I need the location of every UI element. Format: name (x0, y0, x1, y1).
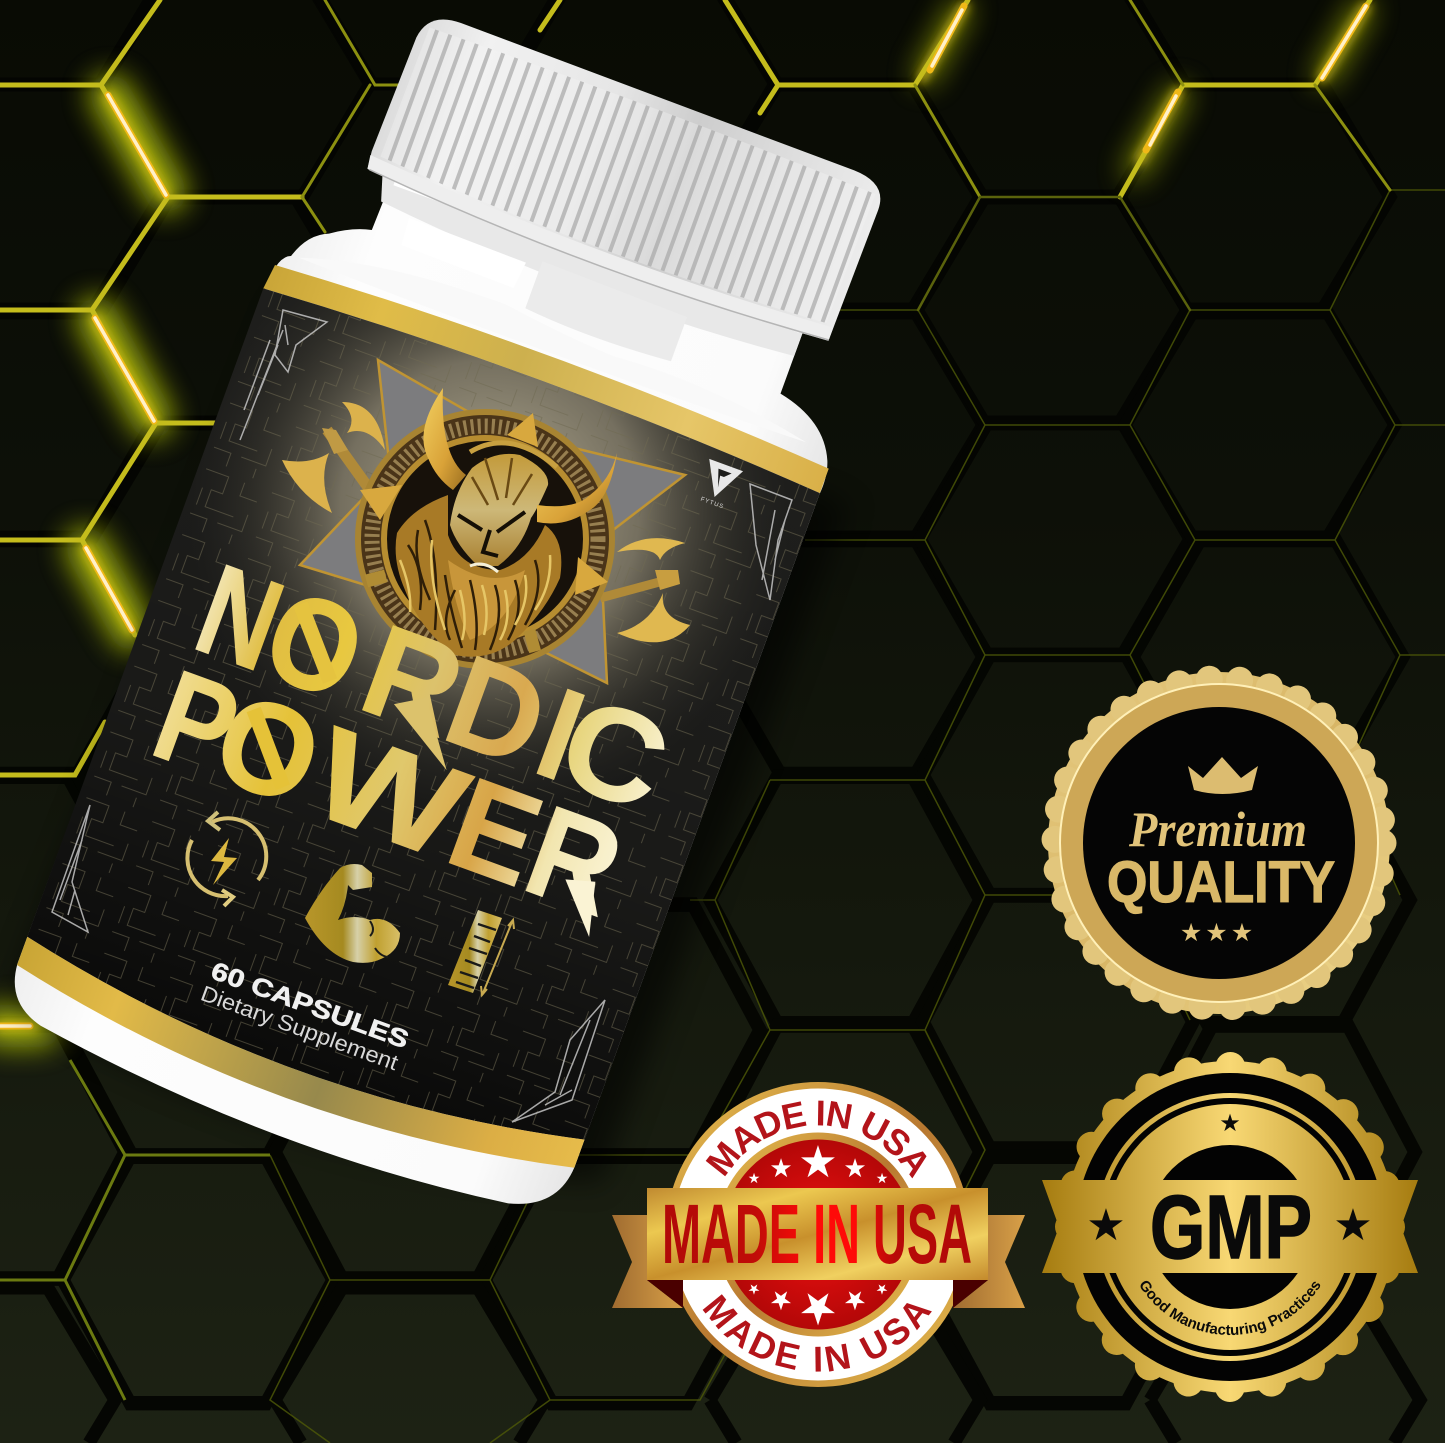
neck shading (369, 174, 804, 365)
bottle cap (361, 9, 889, 349)
seal edge (1048, 672, 1390, 1014)
bottom gold band (6, 937, 585, 1199)
nordic slash and leg (264, 604, 483, 770)
wide glow halo left (0, 95, 166, 1026)
stars: ★ (876, 1281, 888, 1297)
very dim edges (918, 197, 1190, 310)
nordic word: R (345, 596, 481, 765)
star top: ★ (1219, 1109, 1241, 1137)
ribbon stars: ★ (1086, 1200, 1126, 1251)
axe lower right (600, 538, 690, 642)
horn right (537, 453, 617, 524)
ribbon tails (612, 1215, 1025, 1308)
dimmer edges (302, 0, 1390, 232)
icon: energy (187, 812, 266, 906)
stars: ★ (843, 1153, 867, 1183)
power word: P (137, 642, 256, 804)
ribbon text: MADE IN USA (662, 1187, 972, 1281)
stars: ★ (748, 1170, 760, 1186)
label maze pattern (16, 280, 823, 1171)
hair and beard (396, 495, 561, 657)
nordic word: O (247, 560, 382, 728)
nordic word: C (542, 668, 686, 839)
brand logo (694, 459, 743, 513)
stars (748, 1138, 888, 1332)
top gold band (263, 256, 832, 493)
brand logo: FYTUS (700, 497, 725, 511)
stars: ★ (748, 1281, 760, 1297)
badge: made in usa (612, 1082, 1025, 1387)
neck and shoulder (0, 149, 872, 1235)
badge: premium quality (1048, 672, 1390, 1014)
bottle (0, 0, 929, 1237)
capsule count: 60 CAPSULES (207, 957, 412, 1054)
star behind shield (300, 360, 685, 683)
helmet and face (450, 454, 548, 566)
ribbon (1042, 1180, 1418, 1273)
power word: W (294, 699, 485, 887)
viking head (396, 388, 617, 657)
stars: ★ (798, 1284, 838, 1332)
badge: gmp: ★ (1333, 1200, 1373, 1251)
olive edges lower left (0, 1060, 270, 1400)
power word: R (509, 777, 640, 944)
arc text top: MADE IN USA (706, 1100, 926, 1178)
stars: ★ (769, 1285, 793, 1315)
nordic word: I (520, 660, 602, 808)
yellow lines (0, 0, 1370, 775)
gmp text: GMP (1150, 1178, 1312, 1278)
horn left (423, 388, 466, 490)
nordic word: D (429, 626, 565, 795)
ribbon (647, 1188, 988, 1280)
small glow halo right (925, 10, 1362, 170)
bottle body (14, 20, 880, 1204)
quality word: QUALITY (1107, 850, 1335, 915)
stars: ★ (876, 1170, 888, 1186)
arc text bottom: MADE IN USA (702, 1294, 932, 1372)
axe upper left (282, 402, 385, 513)
premium script: Premium (1128, 801, 1307, 857)
glowing edges (0, 0, 1390, 1026)
power slash and leg (220, 710, 623, 937)
inner glow (0, 6, 1366, 1026)
icon: ruler (448, 910, 514, 995)
stars: ★ (843, 1285, 867, 1315)
icon: muscle (305, 864, 400, 963)
curved caption: Good Manufacturing Practices (1140, 1280, 1320, 1336)
crown (1188, 757, 1258, 794)
bottle drop shadow (0, 293, 847, 1237)
hot core highlights (0, 6, 1366, 1026)
product name (72, 534, 686, 1126)
badge: gmp (1042, 1052, 1418, 1402)
stars: ★ (798, 1138, 838, 1187)
thin olive hexagon edges (270, 190, 1445, 1443)
corner ornaments (52, 310, 792, 1122)
label glow (226, 308, 752, 774)
stars: ★★★ (1180, 918, 1256, 947)
stars: ★ (769, 1153, 793, 1183)
power word: O (197, 663, 339, 834)
shield (356, 410, 614, 668)
dark label (16, 280, 823, 1171)
power word: E (432, 749, 559, 914)
nordic word: N (180, 536, 300, 699)
emblem (282, 360, 690, 683)
supplement text: Dietary Supplement (198, 981, 402, 1075)
headband (470, 443, 557, 467)
